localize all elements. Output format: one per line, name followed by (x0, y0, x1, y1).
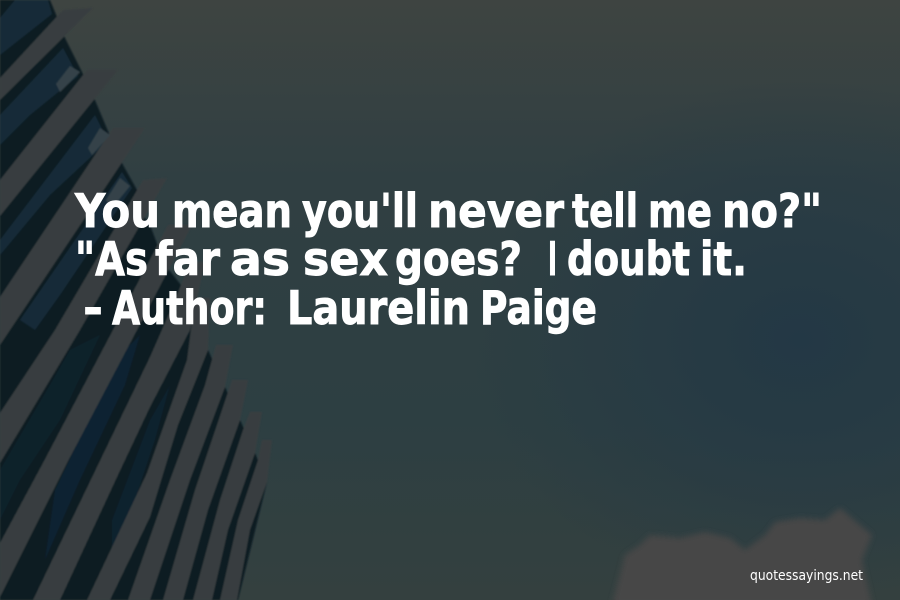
quote line 2: doubt (567, 232, 690, 286)
slat B (0, 70, 118, 216)
quote line 2: I (548, 232, 557, 286)
slat G (87, 298, 210, 600)
quote text (74, 184, 822, 335)
quote line 2: far (155, 232, 220, 286)
quote line 1: no?" (722, 184, 822, 238)
quote line 1 (74, 184, 822, 238)
quote line 1: tell (572, 184, 638, 238)
slat D (0, 178, 167, 463)
slat H (128, 345, 233, 600)
window panes (0, 0, 170, 590)
clouds (612, 508, 872, 600)
slat C (0, 128, 145, 345)
slat A (0, 8, 93, 100)
quote line 1: you'll (302, 184, 418, 238)
slat E (0, 225, 192, 597)
quote line 2: sex (303, 232, 388, 286)
watermark: quotessayings.net (750, 568, 863, 584)
author line: Paige (480, 281, 597, 335)
slat F (33, 262, 205, 600)
quote line 2: "As (75, 232, 148, 286)
quote line 2: goes? (395, 232, 522, 286)
quote line 2: as (230, 232, 290, 286)
slat J (193, 412, 262, 600)
quote line 1: me (648, 184, 712, 238)
window glints (56, 66, 130, 208)
author line: Author: (112, 281, 267, 335)
author line: Laurelin (287, 281, 470, 335)
building illustration (0, 0, 272, 600)
quote line 2: it. (700, 232, 747, 286)
grey slats (0, 8, 272, 600)
slat I (163, 380, 248, 600)
quote line 1: never (428, 184, 564, 238)
quote line 1: mean (172, 184, 292, 238)
quote line 1: You (74, 184, 160, 238)
author line (83, 281, 597, 335)
building dark silhouette (0, 0, 267, 600)
author line: - (83, 281, 103, 335)
slat K (220, 440, 272, 600)
quote line 2 (75, 232, 747, 286)
